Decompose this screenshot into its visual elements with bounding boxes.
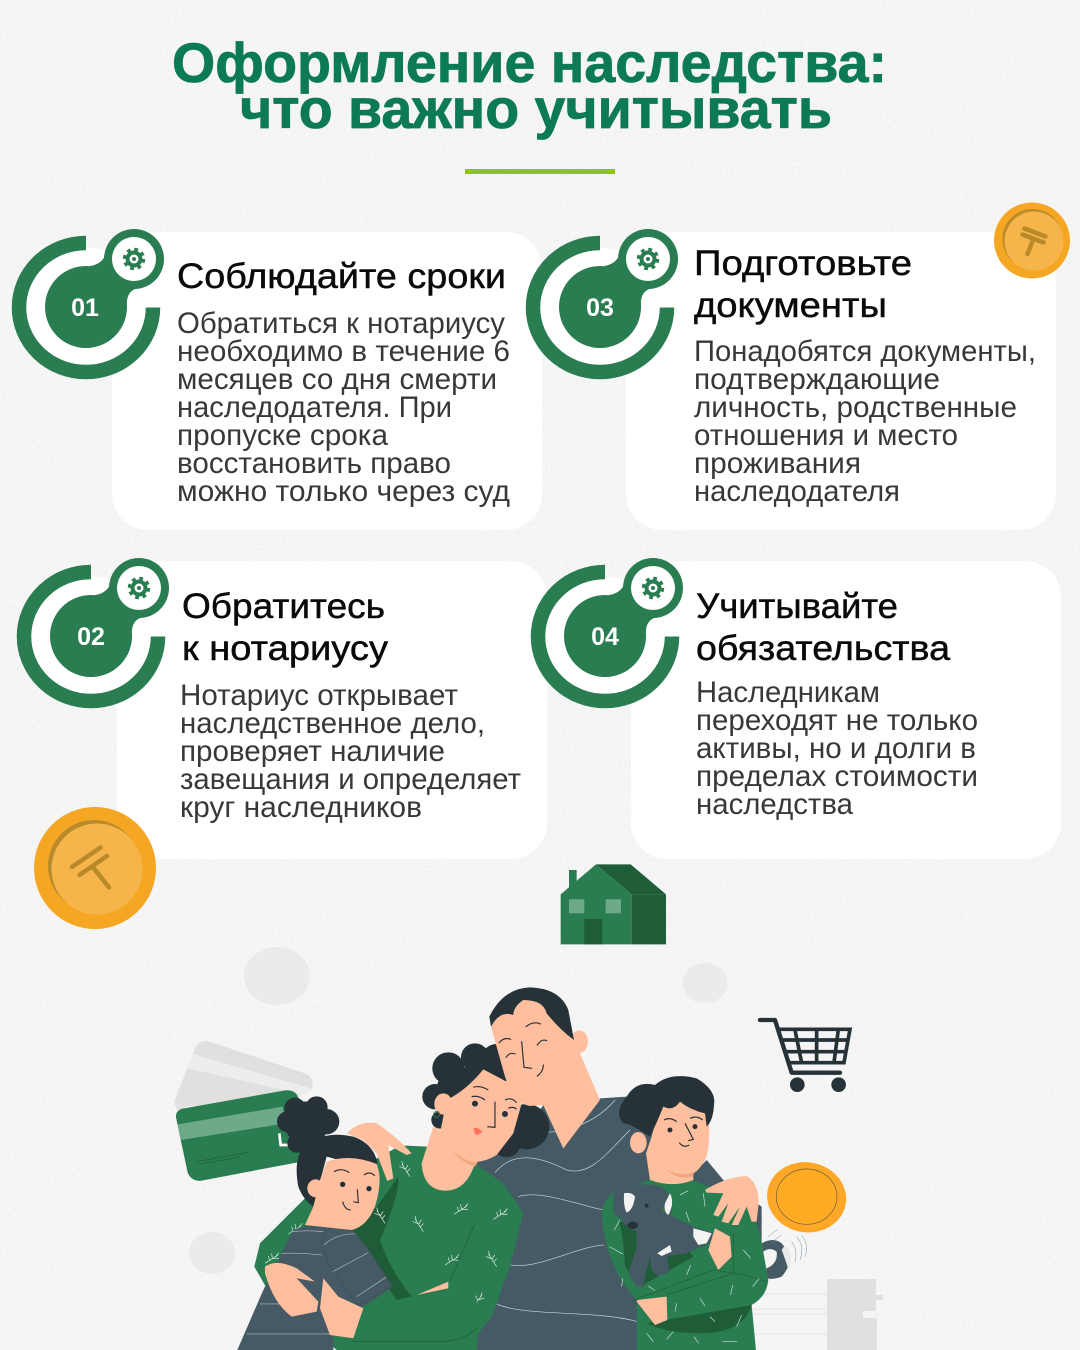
badge 02 <box>24 558 169 701</box>
illustration: credit cards <box>174 1041 313 1181</box>
icon: gold coin <box>761 1156 852 1239</box>
badge 02: 02 <box>77 623 105 651</box>
body 02: круг наследников <box>180 791 422 824</box>
badge 01 <box>19 229 164 372</box>
title underline <box>465 169 615 174</box>
badge 04: 04 <box>591 623 619 651</box>
panel: step 04 <box>538 558 1061 859</box>
decorative grey circles <box>189 947 728 1274</box>
figure: dog tail <box>762 1229 807 1279</box>
woman's arm and hands <box>265 1223 478 1342</box>
icon: shopping cart <box>760 1020 850 1092</box>
woman's sweater sprigs <box>265 1161 507 1327</box>
figure: woman <box>254 1043 549 1350</box>
badge 03 <box>533 229 678 372</box>
body 01 <box>177 307 510 508</box>
body 03: Понадобятся документы, <box>694 335 1036 368</box>
body 02: наследственное дело, <box>180 707 485 740</box>
body 04: пределах стоимости <box>696 760 978 793</box>
heading 03: документы <box>694 286 887 325</box>
dog <box>613 1178 713 1287</box>
title: что важно учитывать <box>240 77 832 140</box>
icon: tenge coin top right <box>994 202 1070 278</box>
body 03 <box>694 335 1036 508</box>
illustration: family <box>237 987 852 1350</box>
body 03: личность, родственные <box>694 391 1017 424</box>
panel: step 03 <box>533 229 1056 530</box>
body 01: месяцев со дня смерти <box>177 363 497 396</box>
body 01: Обратиться к нотариусу <box>177 307 505 340</box>
figure: girl <box>237 1096 478 1350</box>
body 04: активы, но и долги в <box>696 732 976 765</box>
heading 01: Соблюдайте сроки <box>177 257 506 296</box>
body 04: Наследникам <box>696 676 880 709</box>
figure: man's head <box>489 987 600 1148</box>
body 01: необходимо в течение 6 <box>177 335 510 368</box>
figure: man's body <box>470 1097 762 1350</box>
icon: house <box>561 864 666 944</box>
badge 03: 03 <box>586 294 614 322</box>
body 03: подтверждающие <box>694 363 940 396</box>
badge 01: 01 <box>71 294 99 322</box>
heading 03 <box>694 244 912 325</box>
heading 02: Обратитесь <box>182 587 385 626</box>
body 03: отношения и место <box>694 419 958 452</box>
body 03: проживания <box>694 447 861 480</box>
panel: step 02 <box>24 558 547 859</box>
body 04: наследства <box>696 788 854 821</box>
body 03: наследодателя <box>694 475 900 508</box>
background furniture <box>752 1279 883 1350</box>
body 01: восстановить право <box>177 447 451 480</box>
badge 04 <box>538 558 683 701</box>
title <box>172 31 887 140</box>
heading 02 <box>182 587 389 668</box>
body 04: переходят не только <box>696 704 978 737</box>
heading 04 <box>696 587 951 668</box>
heading 02: к нотариусу <box>182 629 389 668</box>
body 01: наследодателя. При <box>177 391 452 424</box>
body 01: можно только через суд <box>177 475 510 508</box>
heading 04: обязательства <box>696 629 951 668</box>
heading 04: Учитывайте <box>696 587 898 626</box>
body 01: пропуске срока <box>177 419 389 452</box>
body 02: Нотариус открывает <box>180 679 458 712</box>
body 02: завещания и определяет <box>180 763 521 796</box>
icon: tenge coin left <box>34 807 156 929</box>
body 02 <box>180 679 521 824</box>
body 02: проверяет наличие <box>180 735 445 768</box>
body 04 <box>696 676 978 821</box>
figure: boy with dog <box>602 1076 768 1350</box>
title: Оформление наследства: <box>172 31 887 94</box>
panel: step 01 <box>19 229 542 530</box>
heading 03: Подготовьте <box>694 244 912 283</box>
